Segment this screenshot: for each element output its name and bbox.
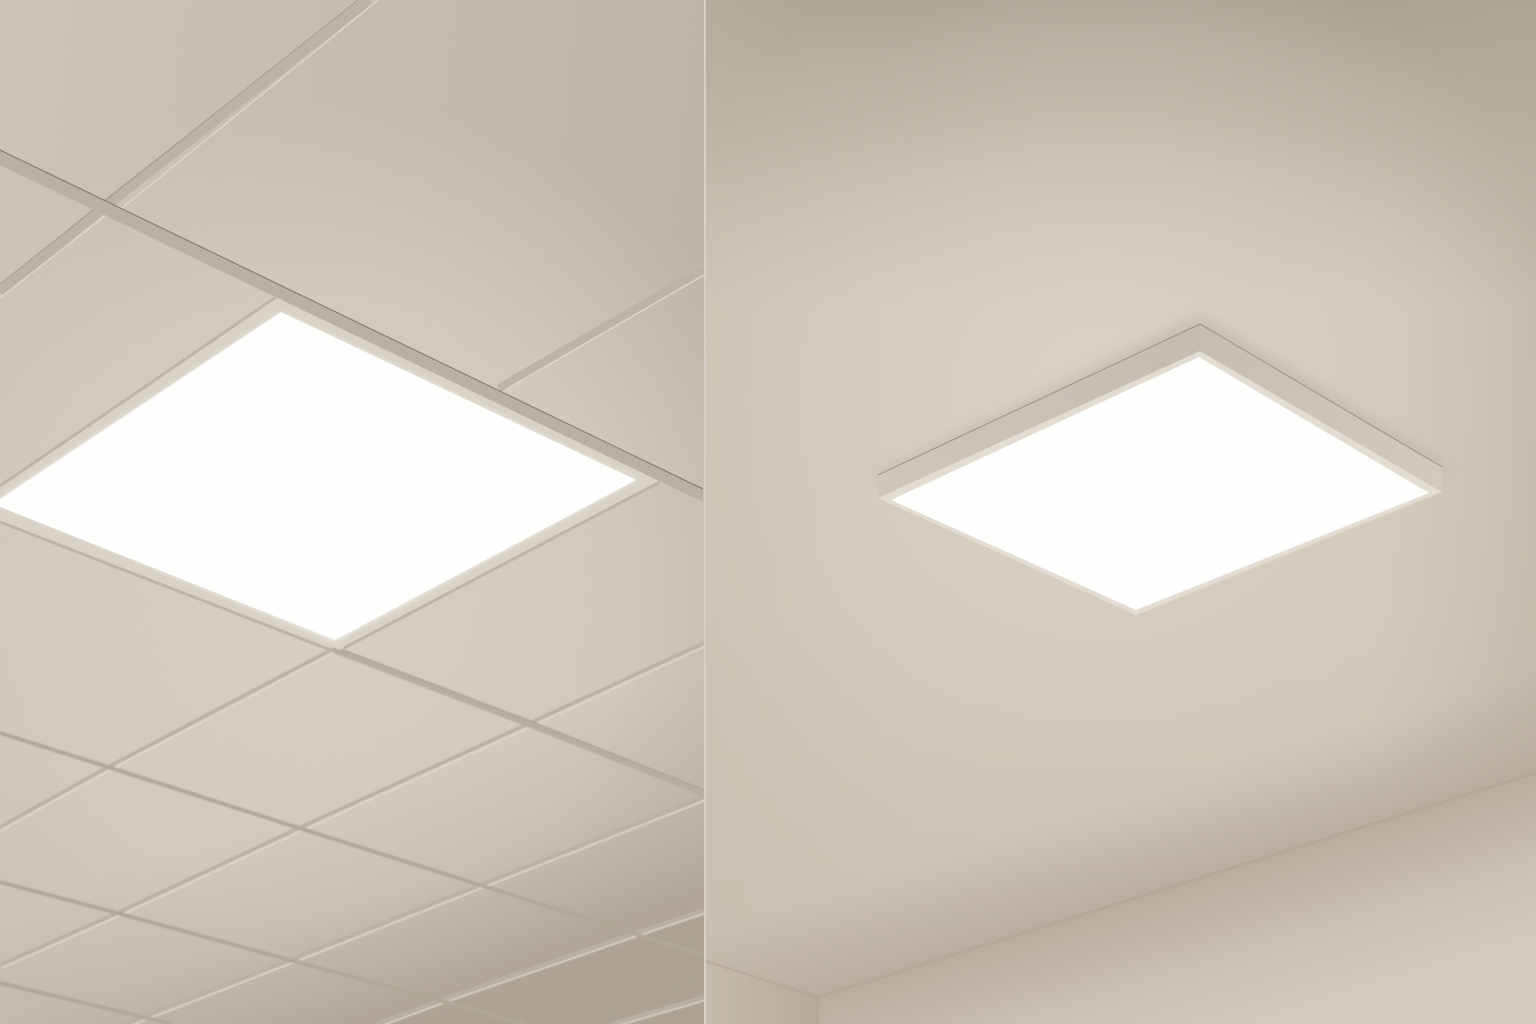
main grid beam above panel	[0, 150, 703, 502]
wall and ceiling crease lines	[705, 773, 1536, 1024]
fixture soft shadow	[872, 316, 1450, 560]
panel: recessed ceiling light in grid ceiling	[0, 0, 706, 1024]
frame outer shadow lines	[0, 297, 660, 651]
far wall, right of corner	[818, 773, 1536, 1024]
fixture side band, left	[878, 324, 1200, 498]
thin grid lines, lower ceiling	[0, 643, 706, 1024]
recessed panel frame	[0, 295, 660, 650]
panel: surface-mounted ceiling light	[705, 0, 1536, 1024]
fixture frame	[878, 351, 1442, 615]
ceiling tile surface	[0, 0, 704, 1024]
side wall, left of corner	[705, 961, 818, 1024]
fixture side band, right	[1200, 324, 1442, 492]
main grid lines, upper ceiling	[0, 0, 704, 390]
surface-mounted fixture	[878, 324, 1442, 615]
divider between the two images	[704, 0, 706, 1024]
ceiling surface with soft lighting	[705, 0, 1536, 1024]
luminous panel	[891, 357, 1429, 610]
luminous recessed panel	[0, 312, 637, 642]
